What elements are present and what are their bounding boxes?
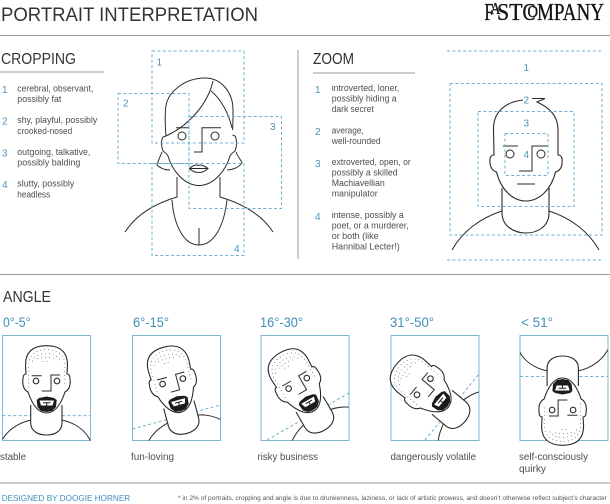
portrait: 31-50 degrees: 31°-50°	[390, 314, 434, 330]
portrait: 0-5 degrees: 0°-5°	[3, 314, 30, 330]
portrait: over 51 degrees: quirky	[519, 463, 547, 475]
illustration: man portrait	[452, 98, 599, 250]
list: cropping meanings	[2, 84, 98, 200]
list: zoom meanings: possibly hiding a	[332, 94, 397, 104]
list: cropping meanings: 3	[2, 148, 8, 160]
footnote: * in 2% of portraits, cropping and angle is due to drunkenness, laziness, or lack of artistic prowess, and doesn’t otherwise reflect subject’s character	[178, 495, 608, 502]
list: zoom meanings: possibly a skilled	[332, 168, 398, 178]
title: PORTRAIT INTERPRETATION	[1, 5, 258, 26]
list: cropping meanings: possibly balding	[17, 158, 80, 168]
list: cropping meanings: headless	[17, 190, 51, 200]
list: zoom meanings: average,	[332, 126, 364, 136]
crop frames 1-4: 3	[270, 122, 276, 133]
portrait: over 51 degrees: < 51°	[521, 314, 553, 330]
Fast Company logo	[484, 0, 604, 26]
portrait: 6-15 degrees: fun-loving	[131, 451, 174, 463]
portrait: 6-15 degrees: 6°-15°	[133, 314, 169, 330]
list: zoom meanings: intense, possibly a	[332, 210, 404, 220]
list: cropping meanings: cerebral, observant,	[17, 84, 93, 94]
list: zoom meanings	[315, 83, 411, 252]
list: zoom meanings: 4	[315, 212, 321, 223]
portrait: 16-30 degrees: risky business	[258, 451, 318, 463]
list: zoom meanings: well-rounded	[331, 136, 381, 146]
portrait: over 51 degrees	[517, 314, 608, 475]
list: zoom meanings: dark secret	[332, 104, 374, 114]
list: cropping meanings: crooked-nosed	[17, 126, 72, 136]
list: cropping meanings: 1	[2, 85, 8, 96]
portrait: 31-50 degrees	[390, 318, 480, 462]
zoom frames 1-4	[447, 51, 602, 260]
zoom frames 1-4: 3	[524, 118, 530, 130]
heading: angle: ANGLE	[3, 289, 51, 306]
list: cropping meanings: outgoing, talkative,	[17, 147, 90, 157]
Fast Company logo: ST	[497, 0, 523, 26]
Fast Company logo: C	[522, 0, 536, 26]
heading: zoom: ZOOM	[313, 51, 354, 68]
list: zoom meanings: manipulator	[332, 189, 378, 199]
list: zoom meanings: 2	[315, 127, 321, 138]
portrait: 16-30 degrees	[258, 318, 350, 462]
portrait: over 51 degrees: self-consciously	[519, 451, 589, 463]
list: zoom meanings: Hannibal Lecter!)	[332, 242, 400, 252]
Fast Company logo: O	[528, 2, 538, 21]
panel: angle	[0, 289, 608, 475]
list: zoom meanings: introverted, loner,	[332, 83, 399, 93]
list: cropping meanings: 4	[2, 180, 8, 191]
zoom frames 1-4: 1	[524, 63, 530, 74]
list: zoom meanings: 3	[315, 159, 321, 170]
list: cropping meanings: slutty, possibly	[17, 178, 75, 188]
panel: cropping	[0, 51, 282, 256]
portrait: 16-30 degrees: 16°-30°	[260, 314, 303, 330]
crop frames 1-4	[118, 51, 282, 256]
portrait: 31-50 degrees: dangerously volatile	[390, 451, 476, 463]
list: zoom meanings: Machiavellian	[332, 178, 385, 188]
heading: cropping: CROPPING	[1, 51, 76, 68]
portrait: 0-5 degrees	[0, 314, 92, 463]
illustration: woman portrait	[125, 78, 273, 245]
portrait: 0-5 degrees: stable	[0, 451, 26, 463]
zoom frames 1-4: 4	[524, 150, 530, 161]
panel: zoom	[313, 51, 602, 260]
Fast Company logo: F	[484, 0, 494, 26]
list: cropping meanings: 2	[2, 116, 8, 128]
zoom frames 1-4: 2	[524, 96, 530, 106]
list: zoom meanings: poet, or a murderer,	[332, 220, 409, 230]
list: zoom meanings: extroverted, open, or	[332, 157, 411, 167]
crop frames 1-4: 2	[123, 98, 129, 110]
portrait: 6-15 degrees	[131, 318, 221, 462]
list: zoom meanings: 1	[315, 85, 321, 96]
list: zoom meanings: or both (like	[332, 231, 379, 241]
crop frames 1-4: 1	[156, 58, 162, 68]
list: cropping meanings: possibly fat	[17, 94, 62, 104]
list: cropping meanings: shy, playful, possibly	[17, 115, 98, 125]
crop frames 1-4: 4	[234, 244, 240, 255]
designer credit: DESIGNED BY DOOGIE HORNER	[2, 493, 130, 503]
